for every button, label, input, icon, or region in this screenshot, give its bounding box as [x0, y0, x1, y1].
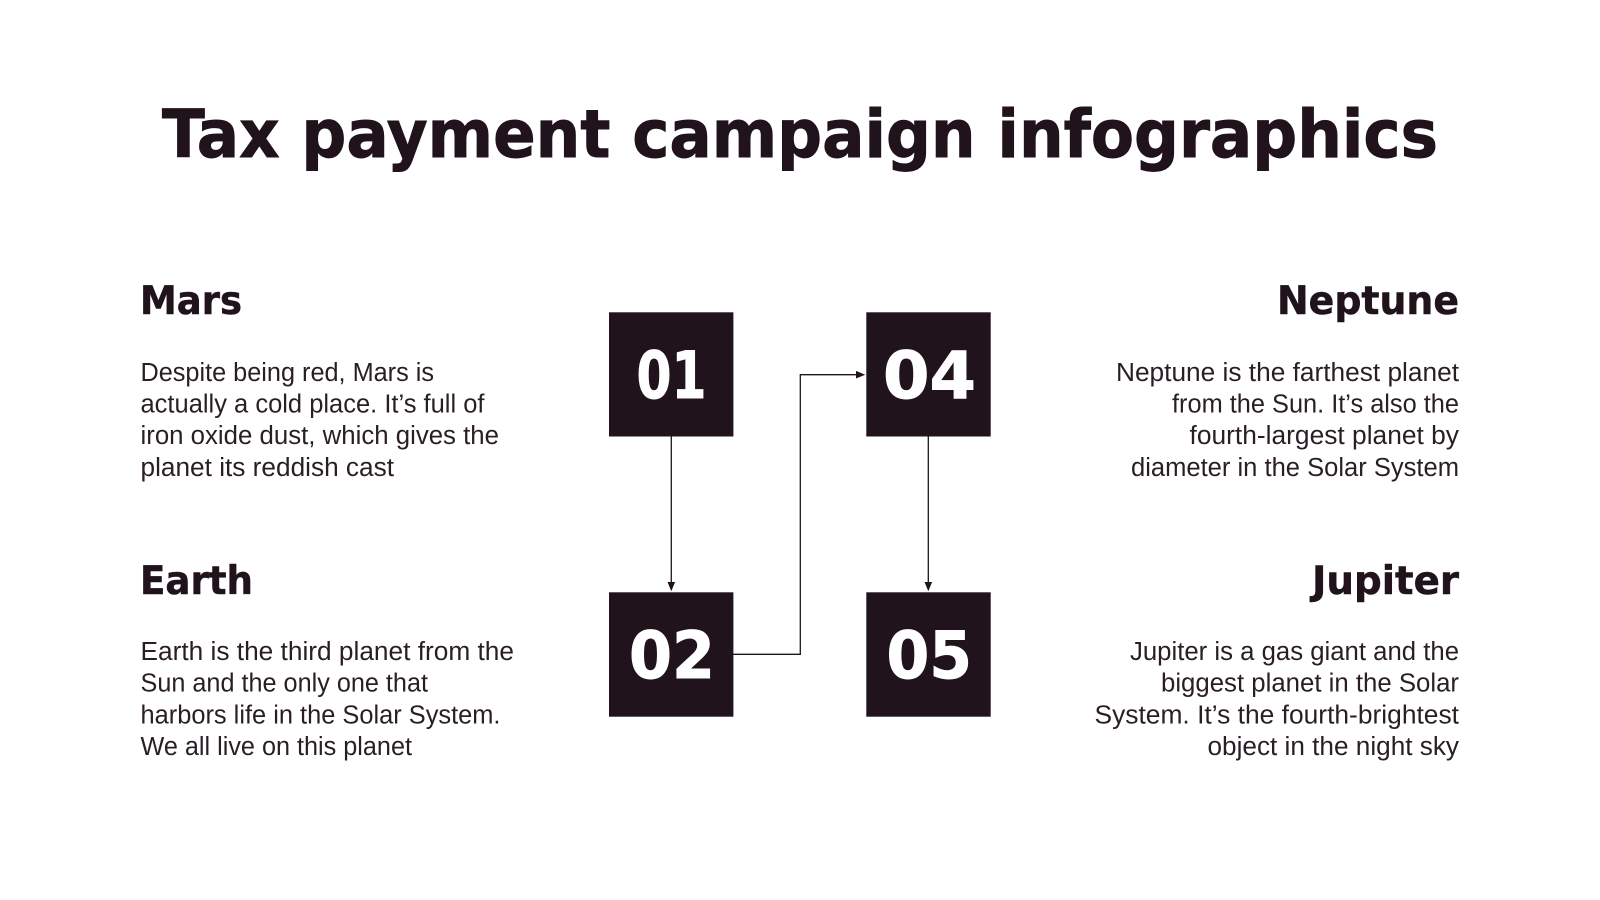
arrow: 01 to 02 [668, 436, 675, 591]
text block: Jupiter description [1094, 638, 1460, 761]
numbered box 04 [866, 312, 991, 436]
numbered box 02 [609, 592, 733, 717]
heading: Mars: Mars [140, 279, 242, 324]
text block: Jupiter description: object in the night sky [1208, 733, 1459, 761]
text block: Earth description [140, 638, 514, 761]
text block: Earth description: harbors life in the Solar System. [140, 702, 500, 730]
arrow: 02 to 04 [733, 371, 865, 654]
text block: Mars description: actually a cold place. It’s full of [140, 391, 485, 419]
text block: Neptune description: diameter in the Solar System [1131, 454, 1459, 482]
panel: Jupiter [1094, 559, 1460, 761]
panel: Mars [140, 279, 499, 482]
numbered box 01: 01 [636, 339, 706, 414]
panel: Earth [140, 559, 514, 761]
text block: Earth description: Sun and the only one that [140, 670, 428, 698]
text block: Jupiter description: Jupiter is a gas giant and the [1130, 638, 1459, 666]
text block: Neptune description: Neptune is the farthest planet [1116, 359, 1459, 387]
text block: Neptune description: from the Sun. It’s also the [1172, 391, 1459, 419]
heading: Earth: Earth [140, 559, 253, 604]
text block: Neptune description [1116, 359, 1459, 482]
text block: Mars description: iron oxide dust, which gives the [140, 422, 499, 450]
heading: Neptune: Neptune [1277, 279, 1459, 324]
numbered box 05 [866, 592, 991, 717]
text block: Mars description: Despite being red, Mars is [140, 359, 434, 387]
heading: Jupiter: Jupiter [1309, 559, 1460, 604]
text block: Jupiter description: System. It’s the fourth-brightest [1094, 702, 1459, 730]
numbered box 05: 05 [886, 619, 972, 694]
numbered box 01 [609, 312, 733, 436]
numbered box 02: 02 [629, 619, 715, 694]
title: Tax payment campaign infographics [162, 96, 1438, 173]
numbered box 04: 04 [883, 339, 976, 414]
text block: Earth description: We all live on this planet [140, 733, 412, 761]
arrow: 04 to 05 [924, 436, 932, 591]
text block: Mars description: planet its reddish cast [140, 454, 394, 482]
panel: Neptune [1116, 279, 1459, 482]
text block: Earth description: Earth is the third planet from the [140, 638, 514, 666]
text block: Neptune description: fourth-largest planet by [1190, 422, 1459, 450]
text block: Mars description [140, 359, 499, 482]
text block: Jupiter description: biggest planet in the Solar [1161, 670, 1460, 698]
